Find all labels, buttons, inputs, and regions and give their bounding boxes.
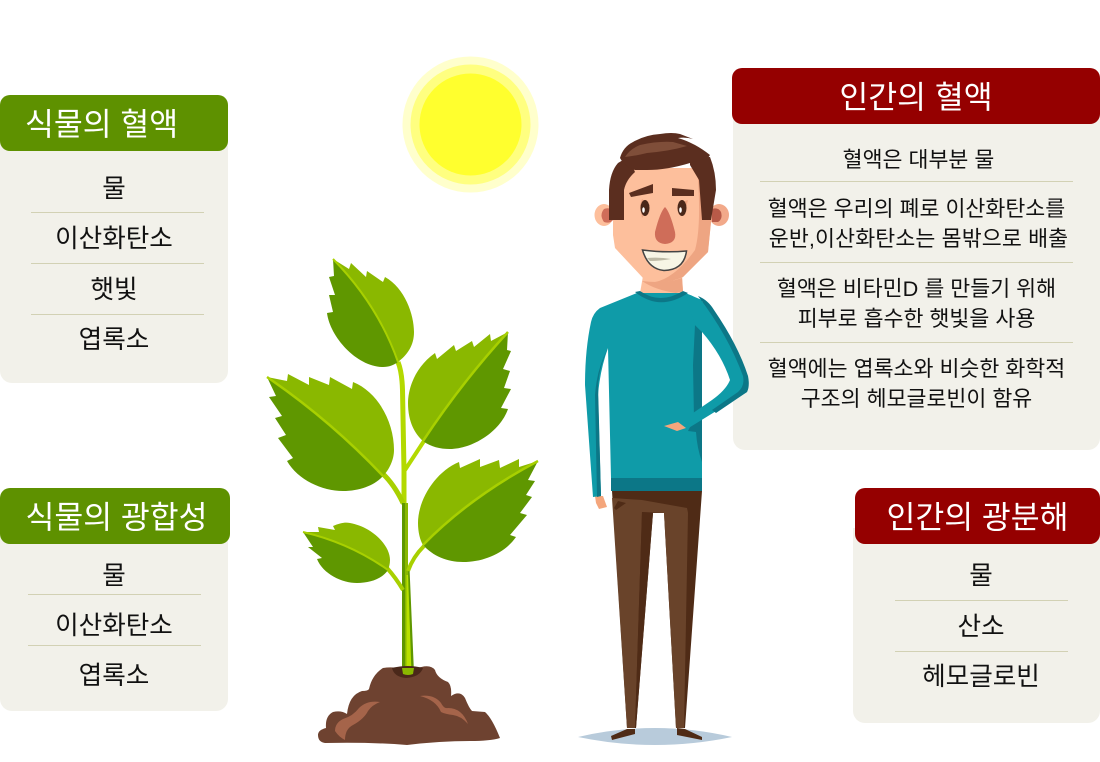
shoes xyxy=(611,728,702,740)
text: carries carbon dioxide: 운반,이산화탄소는 몸밖으로 배출 xyxy=(769,226,1068,251)
text: hemoglobin xyxy=(768,356,1065,411)
item: carbon dioxide: 이산화탄소 xyxy=(55,612,173,640)
item: water: 물 xyxy=(102,175,126,203)
item: sunlight: 햇빛 xyxy=(90,276,138,304)
illustration: man xyxy=(578,133,749,745)
illustration: plant xyxy=(267,259,538,745)
head xyxy=(594,166,729,293)
text: carries carbon dioxide xyxy=(768,196,1068,251)
text: vitamin D: 피부로 흡수한 햇빛을 사용 xyxy=(798,306,1035,331)
text: blood is mostly water: 혈액은 대부분 물 xyxy=(843,147,994,172)
leaf: right lower xyxy=(418,459,538,562)
item: chloroplast: 엽록소 xyxy=(79,326,149,354)
neck xyxy=(640,274,683,302)
heading: human blood xyxy=(732,68,1100,124)
text: hemoglobin: 혈액에는 엽록소와 비슷한 화학적 xyxy=(768,356,1065,381)
leaf: top xyxy=(327,259,414,367)
heading: plant respiration: 식물의 혈액 xyxy=(25,100,178,145)
leaf: left large xyxy=(267,374,394,491)
hair xyxy=(609,133,716,220)
ground shadow xyxy=(578,728,732,745)
trousers xyxy=(612,491,702,728)
heading: plant respiration xyxy=(0,95,228,151)
text: vitamin D xyxy=(777,276,1056,331)
text: vitamin D: 혈액은 비타민D 를 만들기 위해 xyxy=(777,276,1056,301)
panel: human photolysis xyxy=(853,488,1100,723)
heading: photosynthesis: 식물의 광합성 xyxy=(25,493,208,538)
heading: photosynthesis xyxy=(0,488,230,544)
leaf: left lower xyxy=(303,523,390,583)
panel: photosynthesis xyxy=(0,488,230,711)
heading: human blood: 인간의 혈액 xyxy=(839,73,993,118)
item: water: 물 xyxy=(102,562,126,590)
leaf: right upper xyxy=(408,332,511,449)
face features xyxy=(629,184,694,270)
panel: plant respiration xyxy=(0,95,228,383)
heading: human photolysis: 인간의 광분해 xyxy=(886,493,1069,538)
item: water: 물 xyxy=(969,562,993,590)
item: carbon dioxide: 이산화탄소 xyxy=(55,225,173,253)
left hand xyxy=(595,496,607,509)
plant stem xyxy=(382,362,424,673)
text: carries carbon dioxide: 혈액은 우리의 폐로 이산화탄소를 xyxy=(768,196,1065,221)
heading: human photolysis xyxy=(855,488,1100,544)
panel: human blood xyxy=(732,68,1100,450)
item: hemoglobin: 헤모글로빈 xyxy=(922,663,1040,691)
text: hemoglobin: 구조의 헤모글로빈이 함유 xyxy=(801,386,1032,411)
soil mound xyxy=(318,666,500,745)
sweater xyxy=(585,291,749,497)
right hand xyxy=(664,422,686,431)
icon: sun xyxy=(402,56,538,192)
item: chloroplast: 엽록소 xyxy=(79,662,149,690)
item: oxygen: 산소 xyxy=(957,613,1005,641)
